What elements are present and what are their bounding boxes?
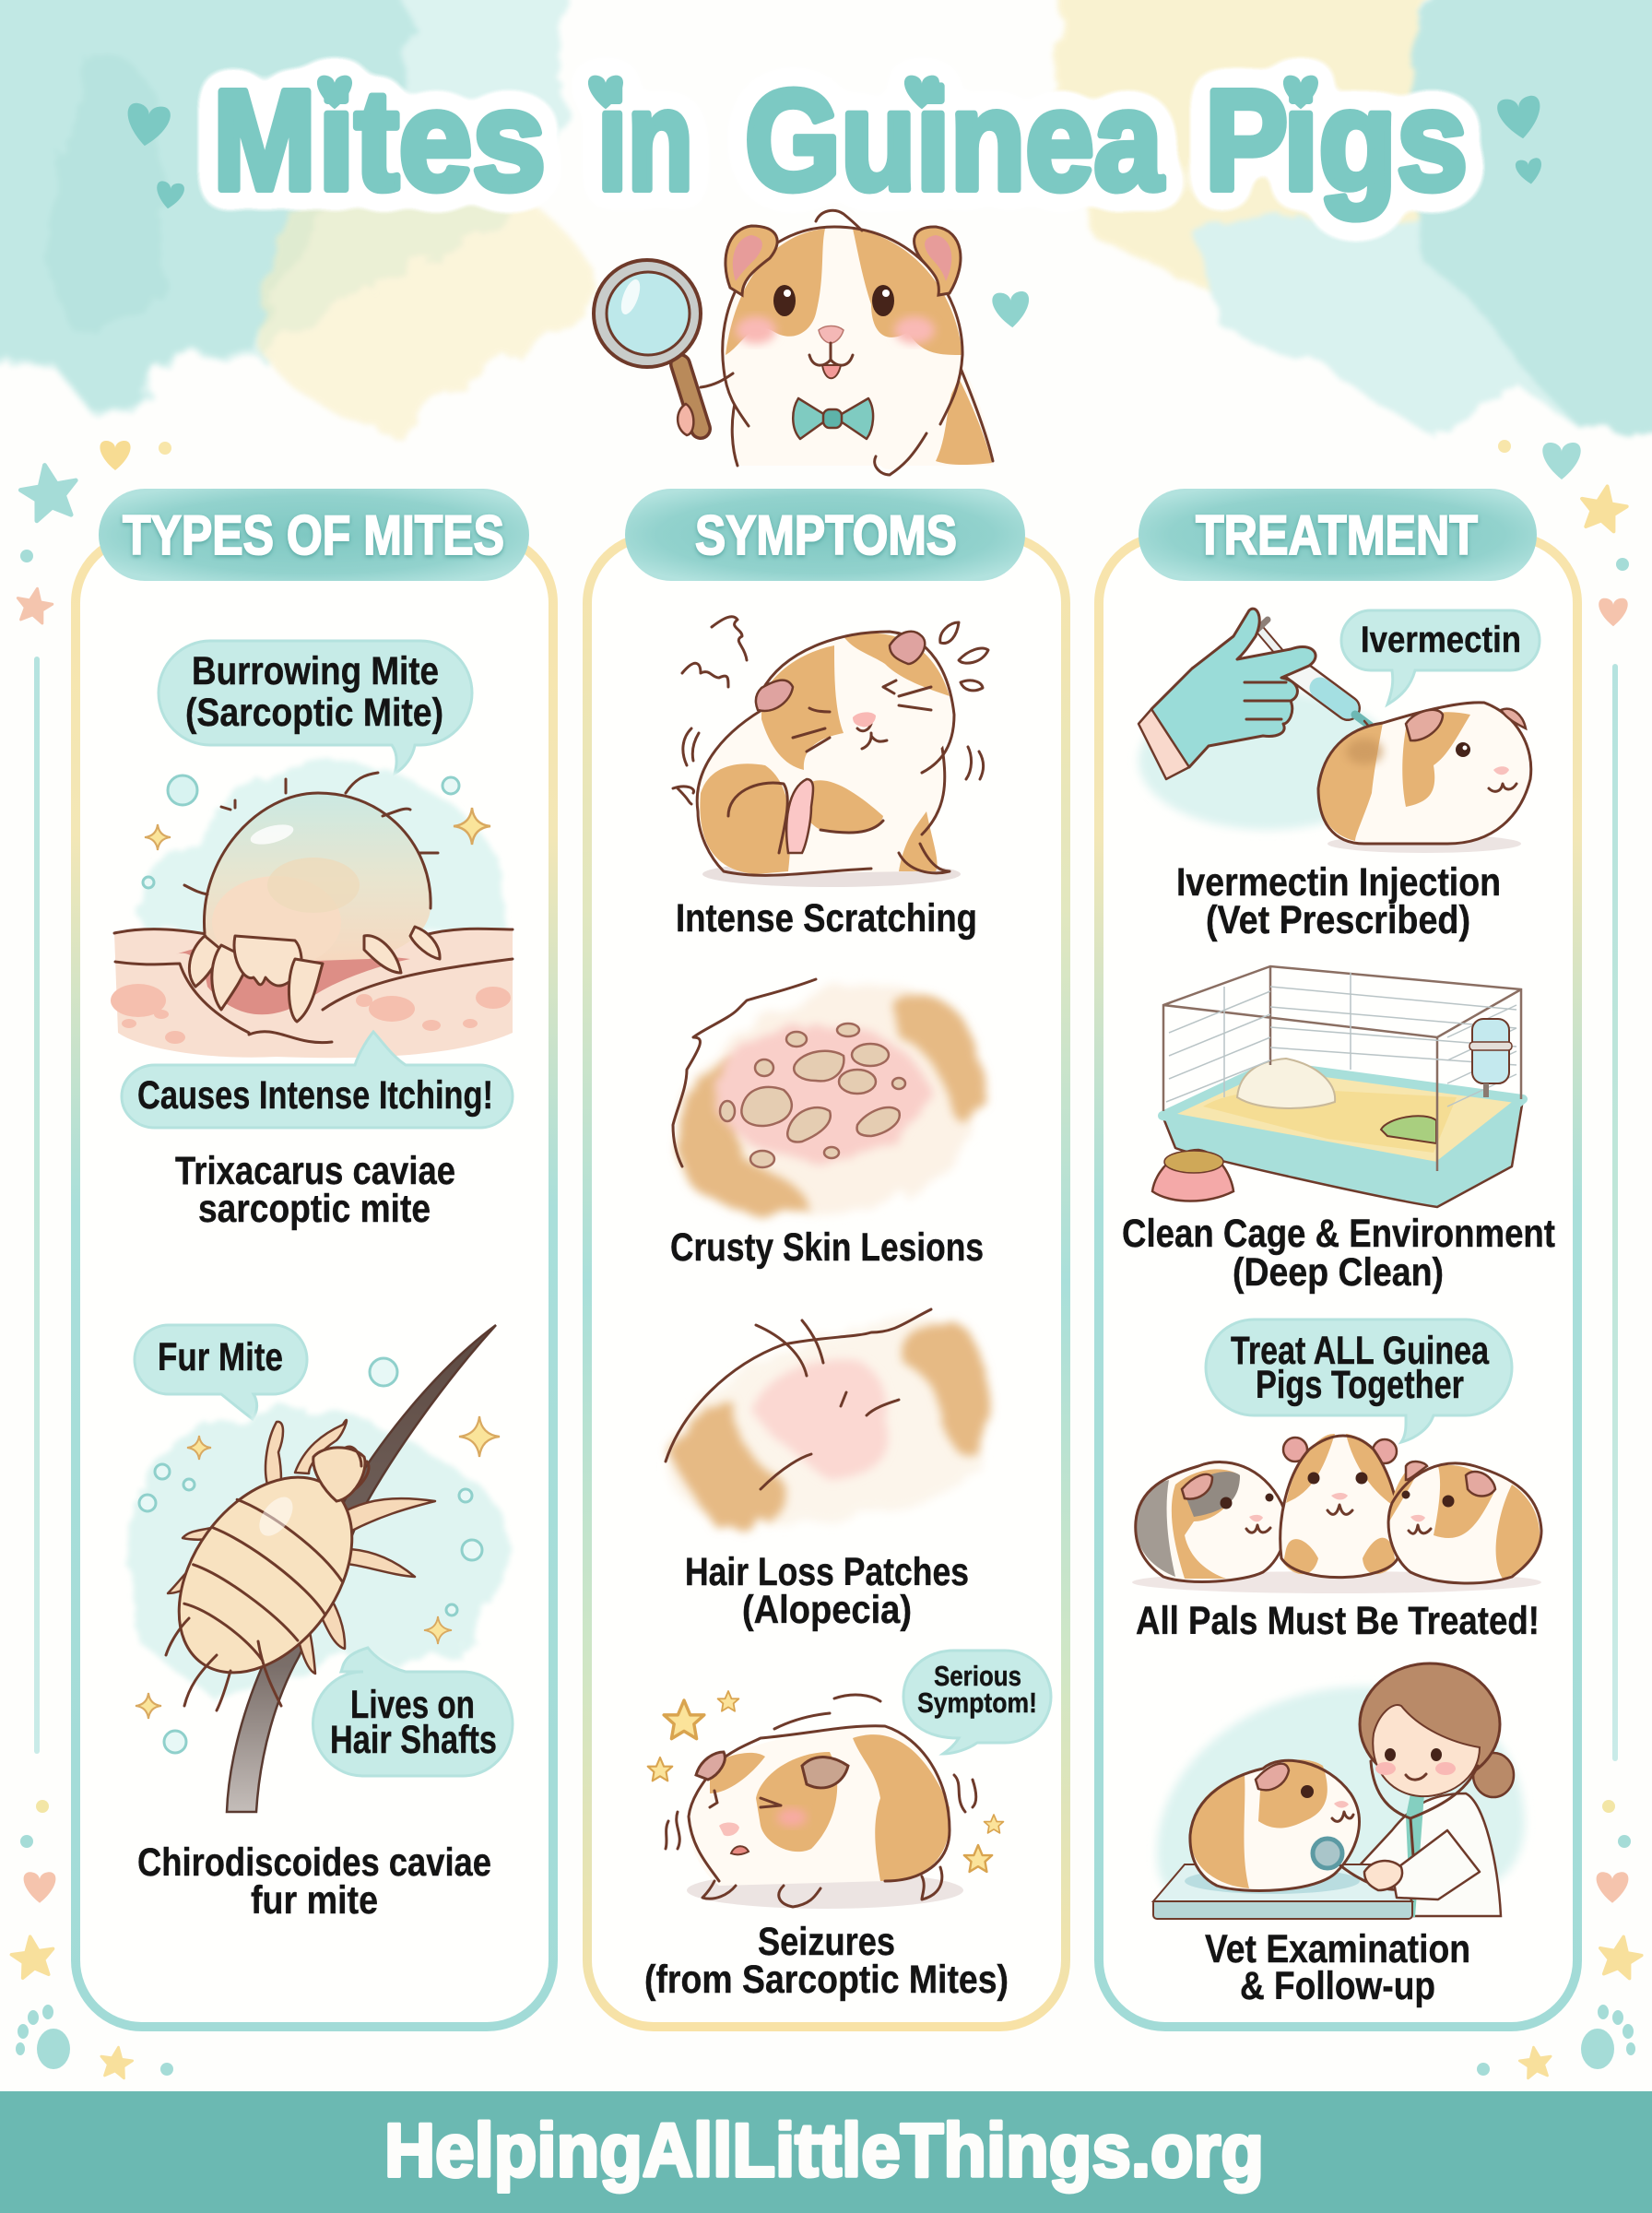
illustration: clean cage: [1152, 966, 1523, 1207]
illustration: three guinea pigs: [1132, 1434, 1541, 1593]
border decorations right: [1477, 440, 1645, 2079]
title: in: [597, 61, 693, 219]
middle pig: [1280, 1434, 1400, 1578]
label: clean cage: Clean Cage & Environment: [1122, 1212, 1555, 1256]
watercolor wash teal right: [1189, 0, 1652, 443]
title: Guinea: [745, 61, 1163, 219]
illustration: fur mite on hair: [124, 1325, 509, 1812]
heading: types of mites: TYPES OF MITES: [123, 504, 504, 566]
title: P: [1205, 61, 1288, 219]
vet sleeve and hand: [1364, 1830, 1480, 1899]
wrist: [1139, 709, 1189, 779]
hero guinea pig with magnifier: [594, 210, 994, 475]
illustration: scratching guinea pig: [673, 617, 988, 887]
label: hair loss patches: (Alopecia): [742, 1588, 912, 1632]
illustration: ivermectin injection: [1139, 609, 1531, 853]
callout: lives on hair shafts: Hair Shafts: [330, 1718, 497, 1762]
label: intense scratching: Intense Scratching: [676, 896, 977, 941]
callout: causes intense itching: [122, 1032, 513, 1128]
callout: treat all guinea pigs: Treat ALL Guinea: [1231, 1329, 1490, 1373]
label: vet examination: [1205, 1927, 1470, 2008]
label: vet examination: & Follow-up: [1240, 1964, 1435, 2008]
callout: ivermectin: [1341, 610, 1540, 704]
title: igs: [1283, 61, 1468, 219]
heart near hero: [992, 290, 1031, 329]
label: hair loss patches: Hair Loss Patches: [685, 1550, 969, 1594]
label: seizures: (from Sarcoptic Mites): [644, 1958, 1009, 2002]
illustration: crusty skin lesions: [673, 979, 985, 1213]
title side hearts: [124, 95, 1544, 210]
glove: [1151, 609, 1316, 767]
hero head: [723, 227, 962, 452]
title: ites: [318, 61, 546, 219]
heading: treatment: TREATMENT: [1196, 504, 1478, 566]
callout: serious symptom: Symptom!: [917, 1686, 1037, 1719]
left pig: [1136, 1462, 1286, 1581]
border decorations left: [9, 441, 173, 2079]
label: chirodiscoides caviae: Chirodiscoides caviae: [137, 1840, 491, 1885]
footer band: [0, 2091, 1652, 2213]
label: clean cage: (Deep Clean): [1233, 1250, 1444, 1295]
label: crusty skin lesions: Crusty Skin Lesions: [670, 1225, 984, 1270]
footer band: HelpingAllLittleThings.org: [384, 2109, 1264, 2193]
label: clean cage: [1122, 1212, 1555, 1295]
heading: treatment: [1139, 489, 1537, 581]
illustration: vet examination: [1153, 1663, 1525, 1919]
panel: symptoms: [587, 489, 1066, 2027]
title: M: [213, 61, 316, 219]
heading: symptoms: SYMPTOMS: [695, 504, 957, 566]
callout: ivermectin: Ivermectin: [1361, 620, 1521, 660]
hero ears: [726, 226, 777, 295]
panel: types of mites: [76, 489, 553, 2027]
callout: fur mite: [135, 1325, 307, 1419]
syringe: [1250, 620, 1380, 740]
hero paw: [878, 424, 925, 469]
panel: treatment: [1099, 489, 1577, 2027]
label: vet examination: Vet Examination: [1205, 1927, 1470, 1971]
label: trixacarus caviae: sarcoptic mite: [198, 1187, 431, 1231]
label: seizures: Seizures: [758, 1920, 895, 1964]
callout: burrowing mite: Burrowing Mite: [192, 649, 439, 693]
hero body: [730, 341, 994, 466]
label: ivermectin injection: (Vet Prescribed): [1206, 898, 1470, 942]
label: all pals: All Pals Must Be Treated!: [1136, 1599, 1540, 1643]
hero face: [773, 285, 796, 316]
callout: causes intense itching: Causes Intense Itching!: [137, 1073, 493, 1118]
label: trixacarus caviae: Trixacarus caviae: [175, 1149, 455, 1193]
callout: lives on hair shafts: Lives on: [350, 1683, 475, 1727]
watercolor wash yellow right: [1051, 0, 1429, 314]
callout: lives on hair shafts: [313, 1648, 513, 1776]
illustration: seizing guinea pig: [648, 1691, 1003, 1909]
label: chirodiscoides caviae: fur mite: [251, 1878, 378, 1923]
hero bow tie: [793, 398, 873, 439]
callout: fur mite: Fur Mite: [158, 1335, 283, 1379]
callout: serious symptom: [903, 1651, 1051, 1754]
callout: burrowing mite: [159, 641, 472, 774]
vet coat: [1345, 1793, 1501, 1916]
right pig: [1388, 1462, 1541, 1583]
illustration: hair loss patches: [666, 1309, 989, 1528]
watercolor wash top left: [0, 0, 567, 415]
food bowl: [1152, 1150, 1233, 1201]
callout: treat all guinea pigs: [1206, 1320, 1512, 1442]
title: [213, 61, 1468, 219]
watercolor wash yellow left: [263, 120, 599, 433]
callout: treat all guinea pigs: Pigs Together: [1256, 1363, 1464, 1407]
label: chirodiscoides caviae: [137, 1840, 491, 1923]
callout: serious symptom: Serious: [934, 1660, 1021, 1692]
heading: symptoms: [625, 489, 1025, 581]
magnifier: [594, 260, 733, 435]
label: trixacarus caviae: [175, 1149, 455, 1231]
label: seizures: [644, 1920, 1009, 2002]
label: hair loss patches: [685, 1550, 969, 1632]
heading: types of mites: [99, 489, 529, 581]
label: ivermectin injection: [1176, 860, 1501, 942]
callout: burrowing mite: (Sarcoptic Mite): [185, 691, 443, 735]
label: ivermectin injection: Ivermectin Injection: [1176, 860, 1501, 905]
scratching pig head: [761, 632, 954, 779]
illustration: sarcoptic mite in skin: [111, 763, 513, 1058]
